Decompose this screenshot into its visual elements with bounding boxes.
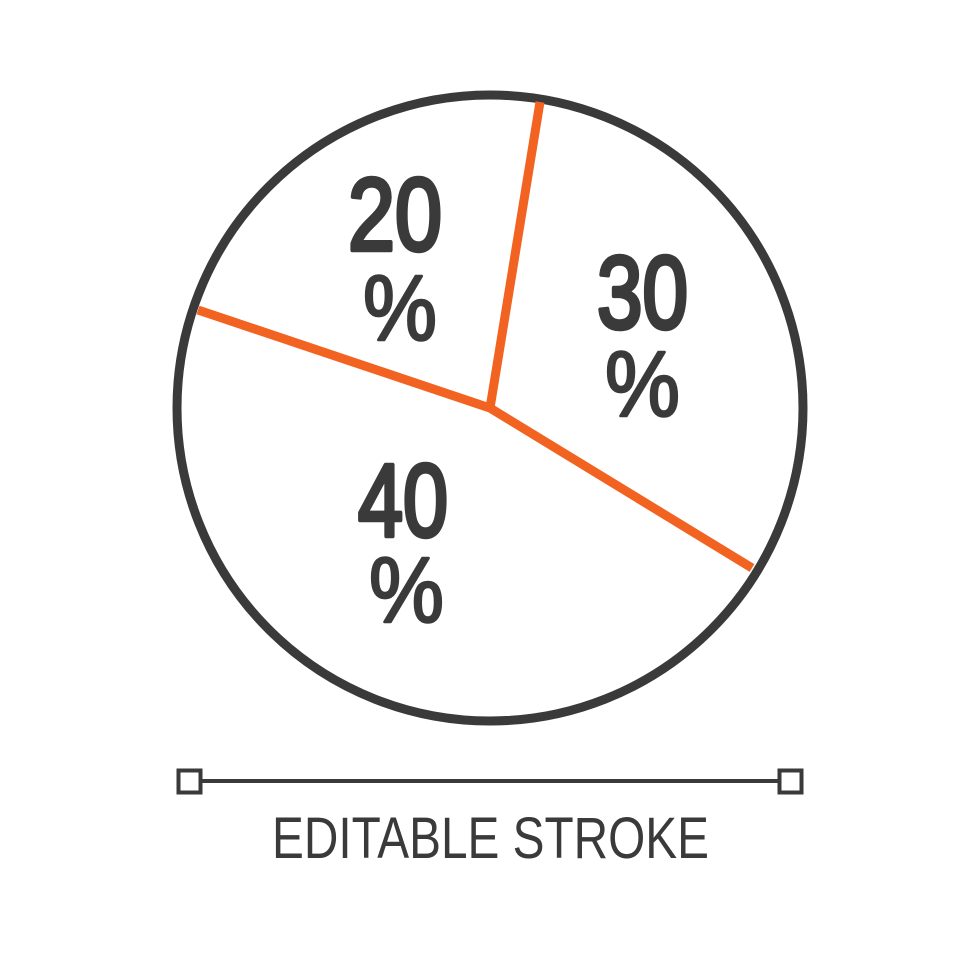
- pie outline: [177, 95, 803, 721]
- slice dividers: [198, 102, 752, 568]
- label: 40 percent: %: [369, 538, 444, 642]
- label: 40 percent: [358, 443, 448, 642]
- label: 20 percent: [348, 157, 442, 360]
- label: 30 percent: 30: [597, 235, 688, 350]
- caption: EDITABLE STROKE: [272, 806, 709, 871]
- label: 30 percent: [597, 235, 688, 436]
- label: 40 percent: 40: [358, 443, 448, 558]
- label: 30 percent: %: [605, 332, 680, 436]
- label: 20 percent: %: [363, 256, 437, 360]
- editable stroke handle: [178, 770, 802, 792]
- pie chart: [177, 95, 803, 721]
- label: 20 percent: 20: [348, 157, 442, 272]
